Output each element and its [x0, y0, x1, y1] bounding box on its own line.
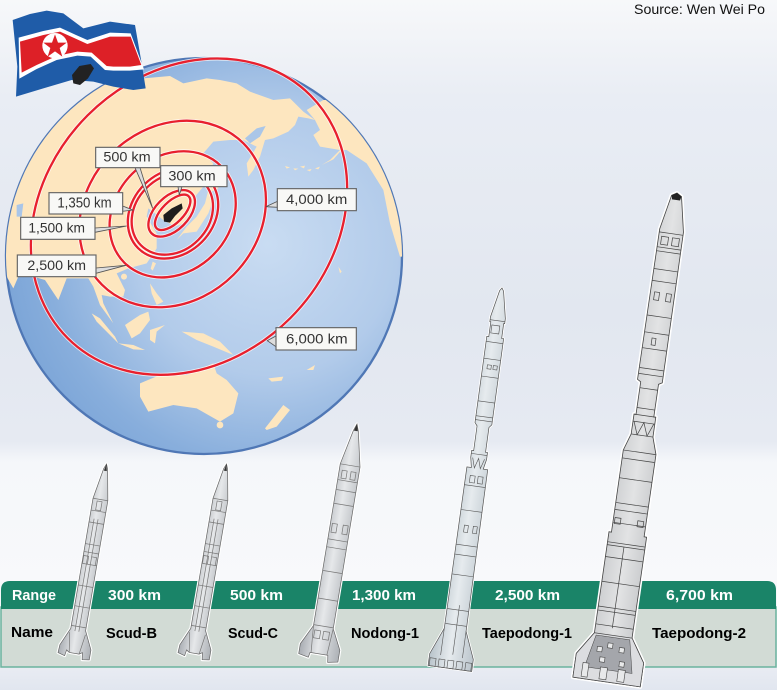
- label: 300 km: [161, 166, 227, 195]
- range rings: [0, 0, 412, 439]
- land masses: [0, 76, 413, 430]
- label: 2,500 km: 2,500 km: [27, 257, 86, 273]
- name row: [11, 625, 746, 642]
- source credit: Source: Wen Wei Po: [634, 1, 765, 17]
- ring: 1,500 km: [109, 150, 237, 277]
- label: 500 km: [96, 147, 160, 208]
- rocket: Taepodong-1: [428, 285, 524, 671]
- flag: [13, 11, 146, 97]
- ring: 500 km: [140, 182, 203, 245]
- globe map: [0, 0, 413, 454]
- range row: 6,700 km: [666, 588, 733, 604]
- name row: Scud-C: [228, 626, 279, 642]
- rocket: Nodong-1: [298, 421, 377, 664]
- North Korea silhouette: [163, 203, 183, 223]
- label: 6,000 km: [267, 328, 356, 350]
- label: 1,500 km: [21, 217, 127, 239]
- rocket: Scud-B: [58, 461, 122, 661]
- label: 2,500 km: [17, 255, 126, 277]
- ring: 300 km: [149, 189, 196, 236]
- ring: 6,000 km: [0, 0, 412, 439]
- table body: [1, 607, 776, 667]
- label: 1,350 km: 1,350 km: [57, 195, 112, 211]
- name row: Name: [11, 625, 53, 641]
- range row: 300 km: [108, 588, 161, 604]
- label: 4,000 km: 4,000 km: [286, 191, 347, 207]
- range row: [12, 588, 733, 604]
- range row: Range: [12, 588, 56, 604]
- label: 1,500 km: 1,500 km: [28, 220, 85, 236]
- table: range and name: [1, 581, 776, 667]
- label: 1,350 km: [49, 193, 133, 214]
- name row: Nodong-1: [351, 626, 419, 642]
- label: 6,000 km: 6,000 km: [286, 330, 348, 346]
- label: 300 km: 300 km: [168, 168, 216, 184]
- rocket: Scud-C: [178, 461, 242, 661]
- globe ocean: [6, 58, 402, 454]
- label: 500 km: 500 km: [103, 149, 151, 165]
- range row: 2,500 km: [495, 588, 560, 604]
- name row: Taepodong-1: [482, 626, 572, 642]
- ring: 1,350 km: [115, 157, 230, 271]
- name row: Taepodong-2: [652, 626, 746, 642]
- ring: 4,000 km: [41, 82, 304, 346]
- range row: 1,300 km: [352, 588, 416, 604]
- rocket: Taepodong-2: [573, 188, 711, 687]
- name row: Scud-B: [106, 626, 157, 642]
- label: 4,000 km: [266, 189, 356, 211]
- ring: 2,500 km: [84, 125, 262, 303]
- table header: [1, 581, 776, 609]
- range row: 500 km: [230, 588, 283, 604]
